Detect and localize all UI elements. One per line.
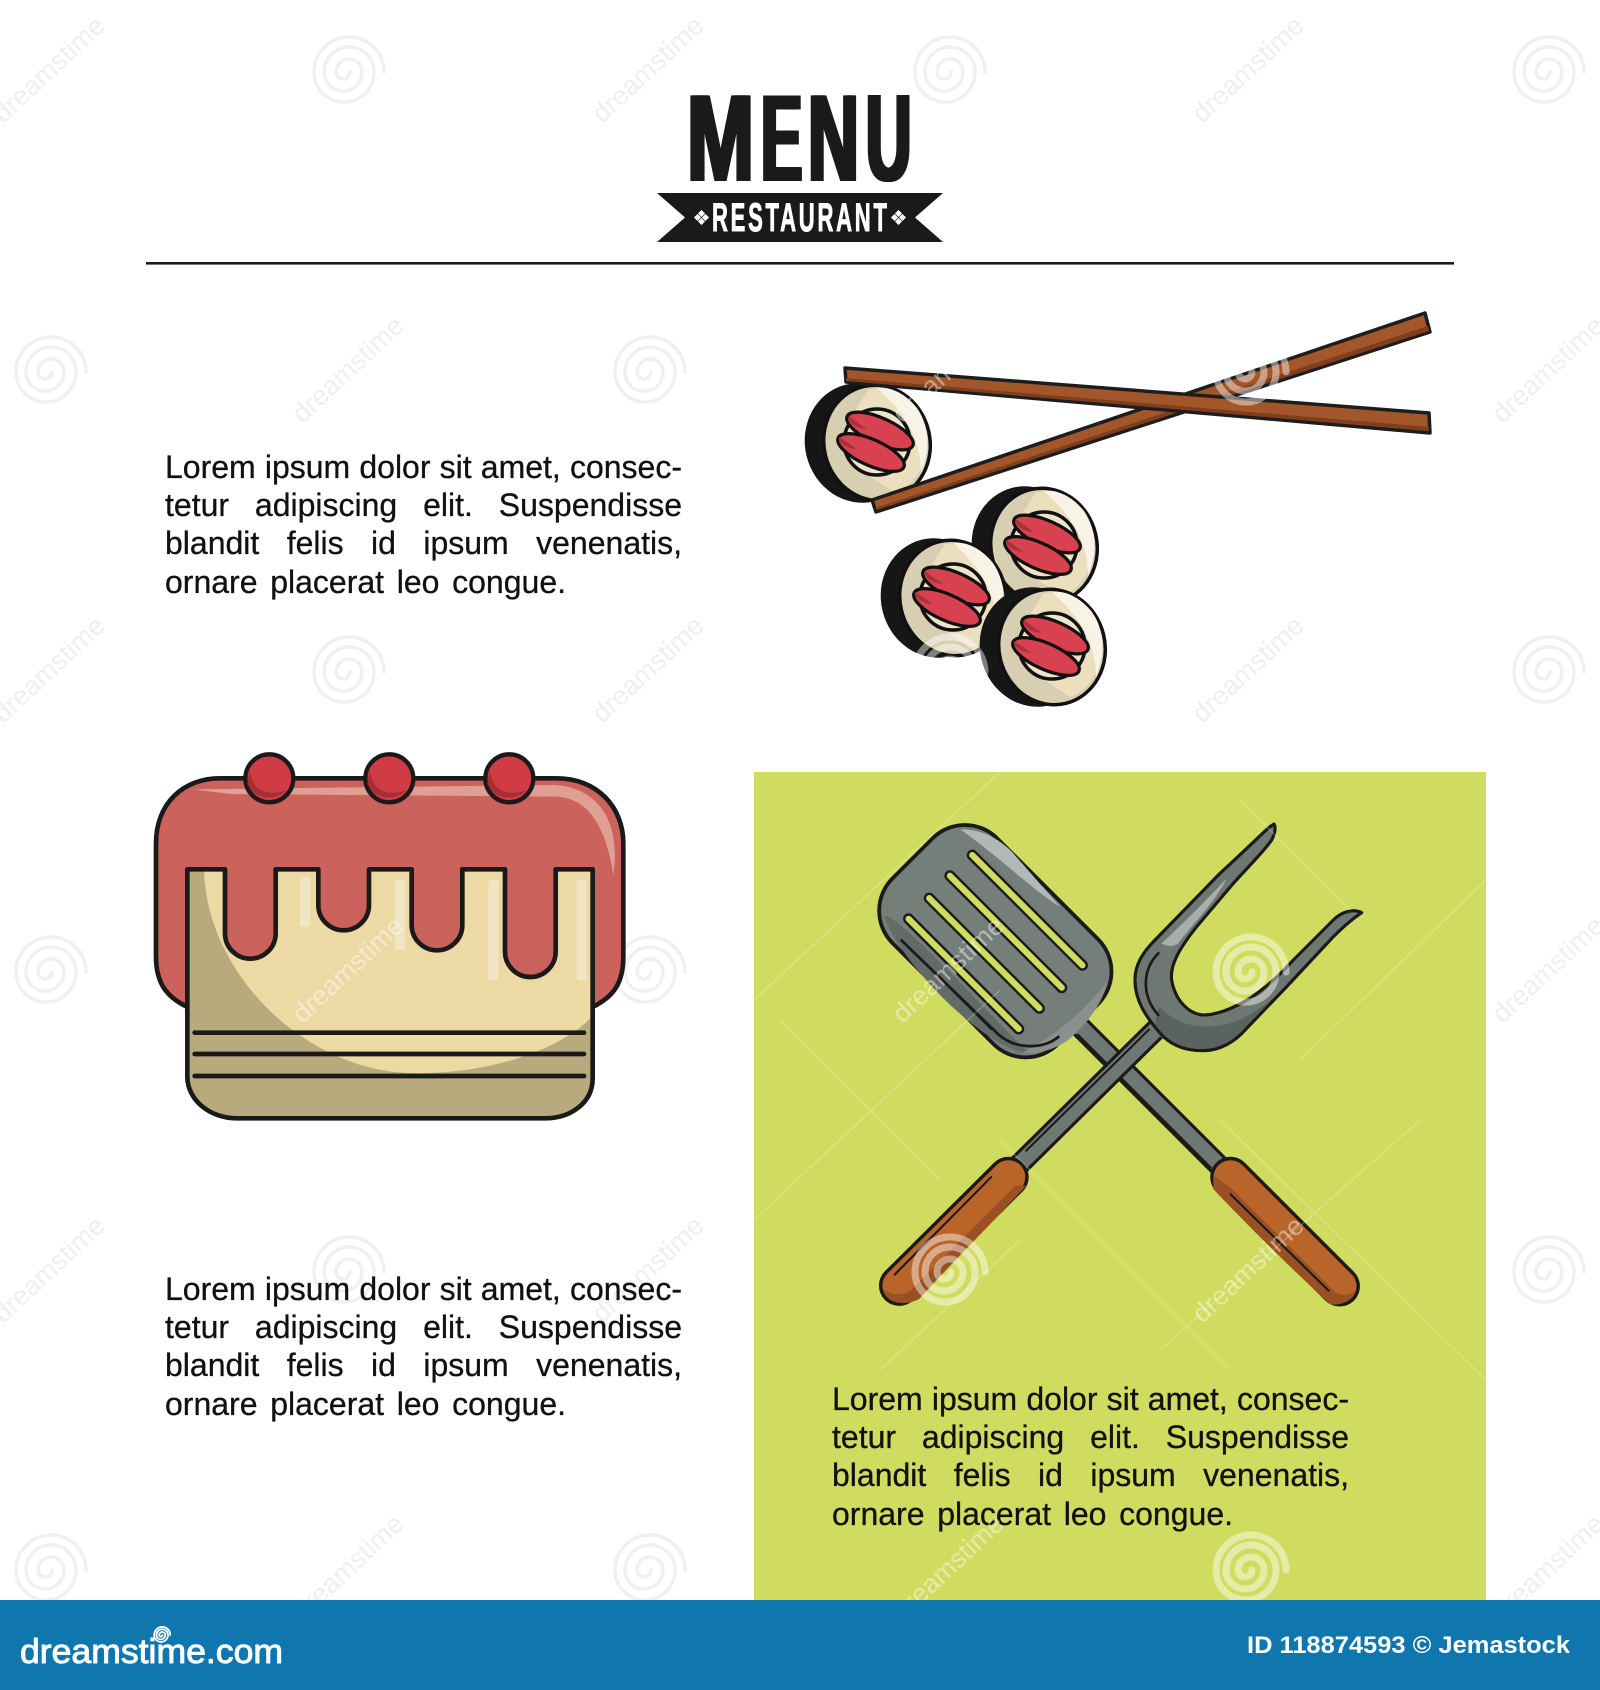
- text block: cake description: Lorem ipsum dolor sit amet, consec-: [165, 1271, 682, 1307]
- icon: upper chopstick: [845, 368, 1430, 433]
- text: dreamstime: [586, 1210, 710, 1328]
- footer credit: image id: ID 118874593 © Jemastock: [1247, 1632, 1571, 1659]
- panel: green tools background: [754, 772, 1486, 1600]
- ornament: left diamonds: [694, 210, 709, 225]
- text: dreamstime: [586, 610, 710, 728]
- cherries: [245, 754, 533, 802]
- text: dreamstime: [286, 1508, 410, 1626]
- text: dreamstime: [1186, 610, 1310, 728]
- title: RESTAURANT ribbon: [657, 193, 943, 242]
- heading: MENU: M: [685, 70, 752, 208]
- icon: lower chopstick: [872, 313, 1430, 512]
- icon: sushi roll front: [967, 575, 1117, 719]
- ribbon banner: [657, 193, 943, 242]
- icon: footer spiral: [154, 1627, 170, 1642]
- heading: MENU: N: [806, 70, 857, 208]
- footer logo: dreamstime.com: dreamstime.com: [20, 1633, 283, 1671]
- text block: tools description: Lorem ipsum dolor sit amet, consec-: [832, 1381, 1349, 1417]
- text: dreamstime: [886, 1508, 1010, 1626]
- text: dreamstime: [1186, 1210, 1310, 1328]
- ornament: right diamonds: [891, 210, 906, 225]
- illustration: cake: [156, 754, 623, 1118]
- text block: cake description: [165, 1271, 682, 1422]
- heading: MENU: U: [864, 70, 909, 208]
- text: dreamstime: [286, 910, 410, 1028]
- text block: tools description: tetur adipiscing elit. Suspendisse: [832, 1419, 1349, 1455]
- text block: sushi description: Lorem ipsum dolor sit amet, consec-: [165, 449, 682, 485]
- text block: tools description: ornare placerat leo congue.: [832, 1496, 1233, 1532]
- text block: sushi description: ornare placerat leo congue.: [165, 564, 566, 600]
- illustration: spatula and carving fork: [860, 806, 1362, 1305]
- text: dreamstime: [1186, 10, 1310, 128]
- cake frosting: [156, 778, 623, 1007]
- text block: sushi description: tetur adipiscing elit. Suspendisse: [165, 487, 682, 523]
- text block: sushi description: blandit felis id ipsum venenatis,: [165, 525, 682, 561]
- text block: cake description: ornare placerat leo congue.: [165, 1386, 566, 1422]
- text block: sushi description: [165, 449, 682, 600]
- text: dreamstime: [586, 10, 710, 128]
- icon: sushi roll left: [868, 526, 1018, 670]
- text block: cake description: tetur adipiscing elit. Suspendisse: [165, 1309, 682, 1345]
- illustration: sushi and chopsticks: [792, 313, 1430, 719]
- icon: sushi roll held by chopsticks: [792, 371, 942, 515]
- text block: cake description: blandit felis id ipsum venenatis,: [165, 1347, 682, 1383]
- ribbon text: RESTAURANT: RESTAURANT: [712, 195, 887, 240]
- text block: tools description: [832, 1381, 1349, 1532]
- icon: carving fork head: [1135, 824, 1362, 1051]
- icon: spatula: [860, 806, 1356, 1305]
- heading: MENU: [685, 70, 910, 208]
- icon: carving fork handle: [883, 1027, 1158, 1303]
- heading: MENU: E: [758, 70, 800, 208]
- icon: sushi roll top: [959, 474, 1109, 618]
- text: dreamstime: [286, 310, 410, 428]
- text: dreamstime: [886, 910, 1010, 1028]
- text block: tools description: blandit felis id ipsum venenatis,: [832, 1457, 1349, 1493]
- cake body: [187, 867, 595, 1118]
- text: dreamstime: [886, 310, 1010, 428]
